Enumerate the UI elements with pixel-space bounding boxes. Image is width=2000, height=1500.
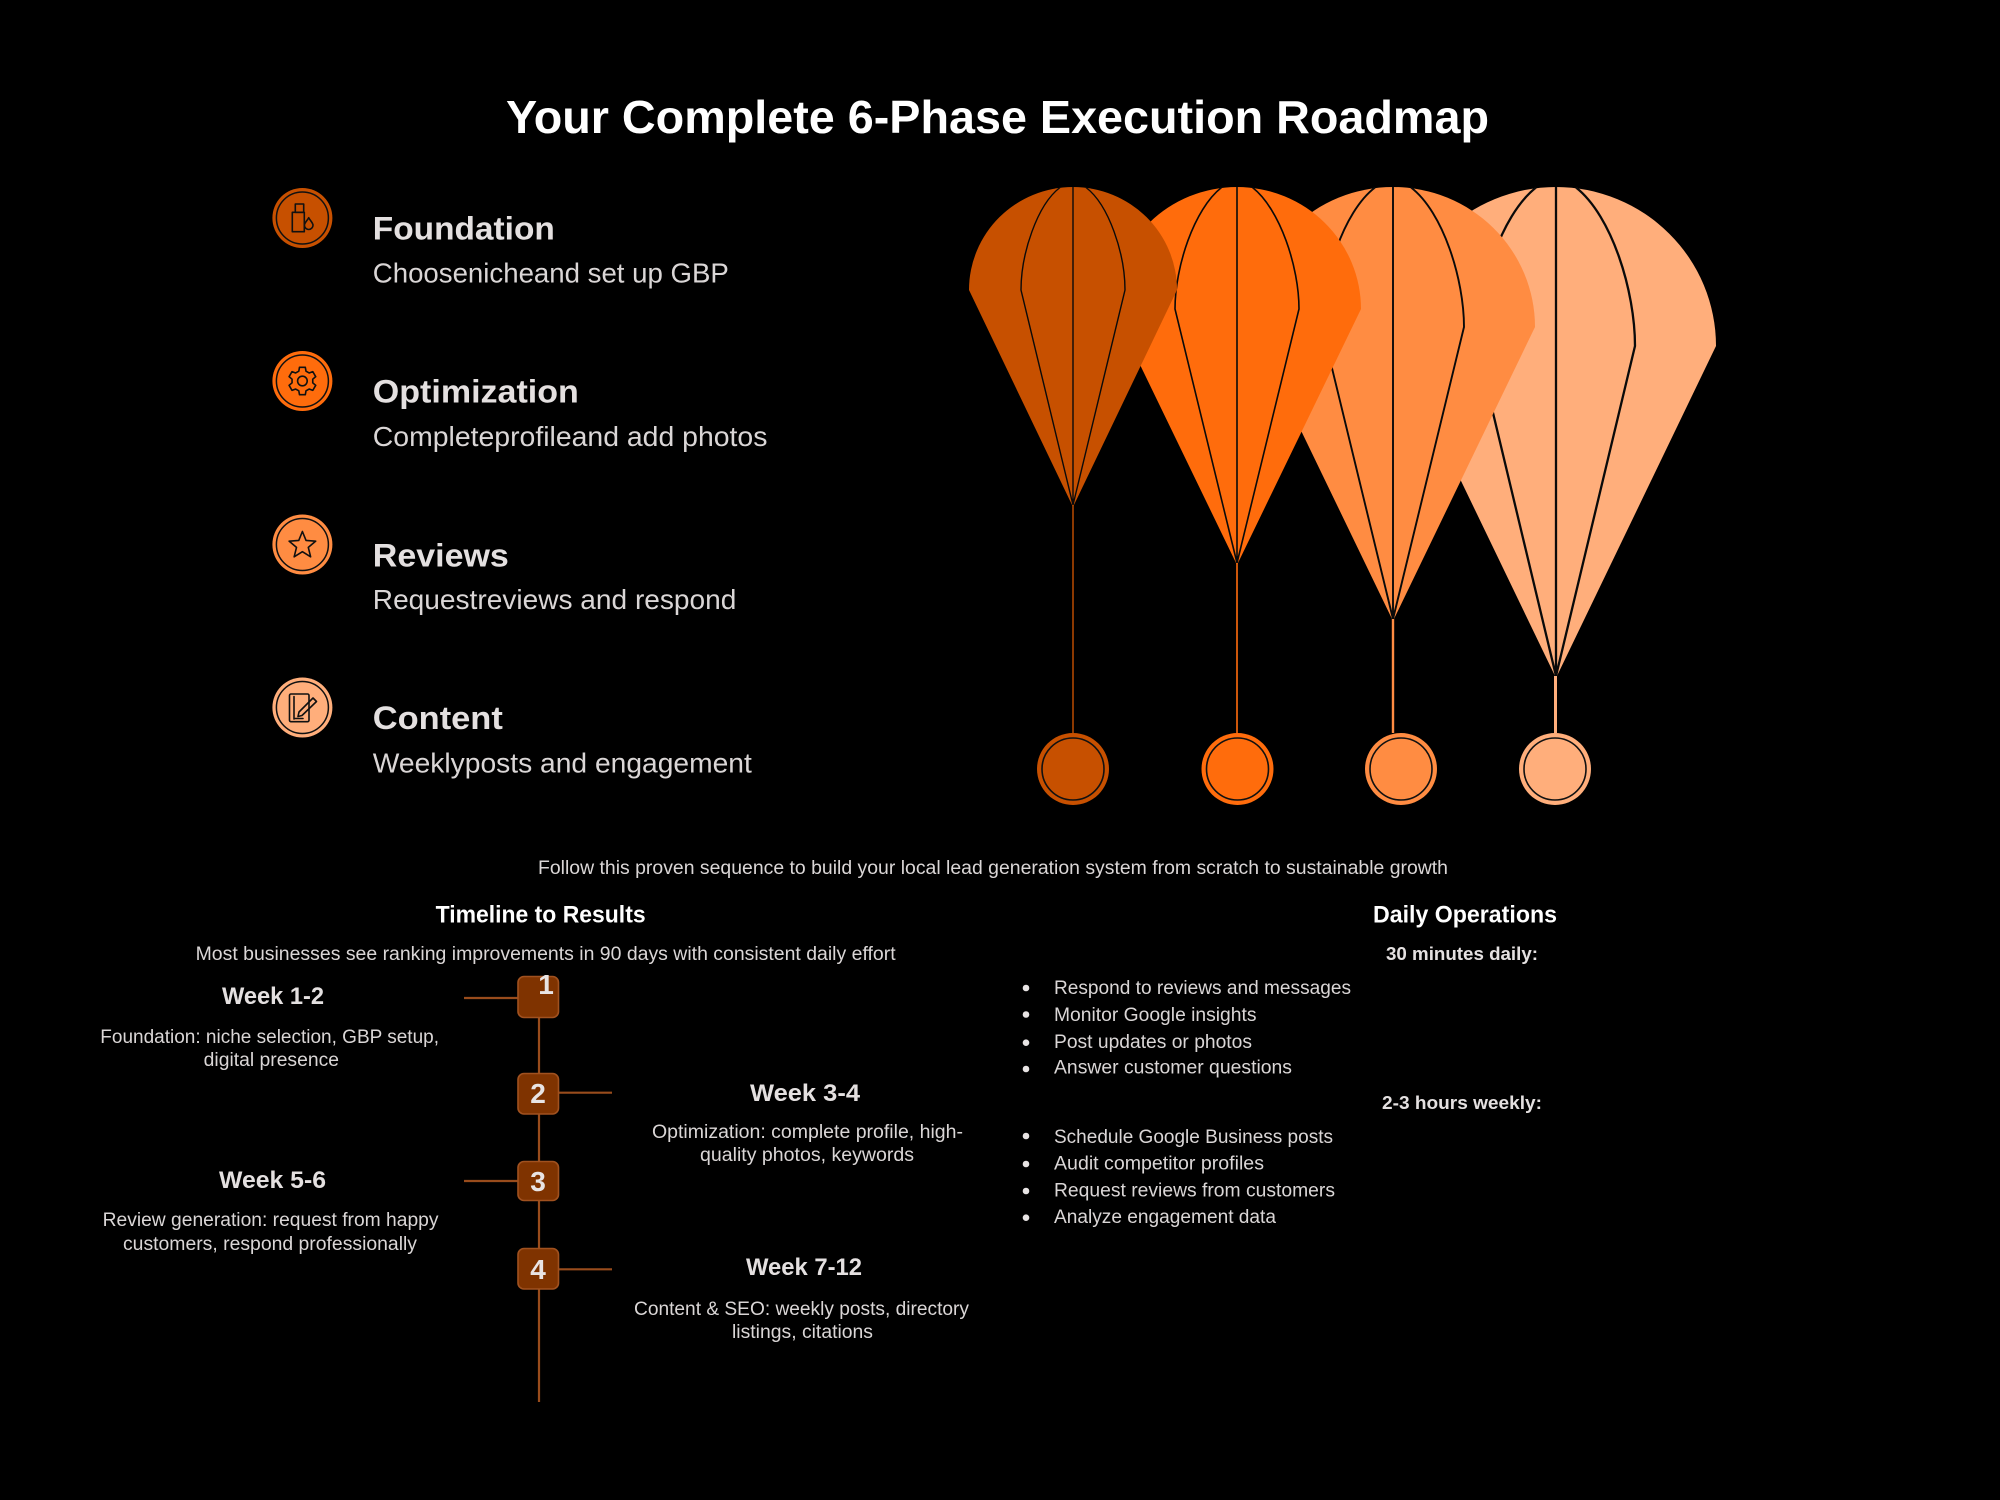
heading: Optimization: Optimization [373, 374, 579, 410]
step 3: Review generation: request from happy [103, 1210, 439, 1231]
list: daily tasks: Answer customer questions [1054, 1058, 1292, 1078]
step 3: 3 [530, 1166, 546, 1197]
heading: Reviews: Reviews [373, 538, 509, 574]
timeline spine [538, 1017, 540, 1402]
step 2: Week 3-4 [750, 1080, 861, 1107]
heading: Timeline to Results: Timeline to Results [436, 902, 646, 929]
step 4: 4 [530, 1254, 546, 1285]
list: daily tasks: Post updates or photos [1054, 1032, 1252, 1053]
step 4: Content & SEO: weekly posts, directory [634, 1299, 970, 1320]
step 1 [100, 969, 559, 1071]
step 1: 1 [538, 969, 554, 1000]
step 4 [518, 1248, 970, 1343]
text: subtitle sequence note: Follow this proven sequence to build your local lead generation system from scratch to sustainable growth [538, 858, 1448, 879]
step 3: Week 5-6 [219, 1167, 326, 1194]
list: daily tasks: Respond to reviews and messages [1054, 978, 1351, 999]
list: weekly tasks: Request reviews from customers [1054, 1180, 1335, 1202]
step 2: 2 [530, 1078, 546, 1109]
heading: Daily Operations: Daily Operations [1373, 902, 1557, 929]
icon: gear [272, 351, 332, 411]
phase: Reviews [272, 514, 736, 615]
text: Reviews description: Requestreviews and respond [373, 584, 736, 615]
chart: balloon graphic [969, 187, 1716, 805]
step 1: Week 1-2 [222, 983, 324, 1010]
balloon 1 [969, 187, 1177, 805]
step 3 [103, 1162, 558, 1255]
step 2: Optimization: complete profile, high- [652, 1122, 963, 1143]
phase: Content [272, 678, 752, 779]
text: Content description: Weeklyposts and engagement [373, 748, 752, 779]
panel: timeline to results [100, 902, 970, 1402]
icon: bottle and drop [272, 188, 332, 248]
text: Optimization description: Completeprofileand add photos [373, 421, 767, 452]
heading: Content: Content [373, 700, 503, 736]
phase: Optimization [272, 351, 767, 452]
subheading: 2-3 hours weekly: 2-3 hours weekly: [1382, 1092, 1542, 1113]
step 1: digital presence [204, 1050, 339, 1071]
balloon 4 [1396, 187, 1716, 805]
balloon 3 [1251, 187, 1535, 805]
step 4: Week 7-12 [746, 1254, 862, 1281]
text: Foundation description: Choosenicheand set up GBP [373, 258, 729, 289]
list: daily tasks [1023, 978, 1351, 1078]
panel: daily operations [1023, 902, 1557, 1228]
step 2 [518, 1074, 963, 1166]
step 1: Foundation: niche selection, GBP setup, [100, 1027, 439, 1048]
balloon 2 [1113, 187, 1361, 805]
icon: notepad and pencil [272, 678, 332, 738]
text: timeline intro: Most businesses see ranking improvements in 90 days with consistent daily effort [196, 944, 896, 965]
list: weekly tasks [1023, 1127, 1335, 1228]
step 2: quality photos, keywords [700, 1145, 914, 1166]
subheading: 30 minutes daily: 30 minutes daily: [1386, 943, 1538, 964]
phase: Foundation [272, 188, 729, 289]
step 3: customers, respond professionally [123, 1234, 417, 1255]
list: weekly tasks: Analyze engagement data [1054, 1207, 1276, 1228]
step 4: listings, citations [732, 1322, 873, 1343]
list: weekly tasks: Schedule Google Business posts [1054, 1127, 1333, 1148]
title: Your Complete 6-Phase Execution Roadmap [506, 91, 1489, 143]
list: weekly tasks: Audit competitor profiles [1054, 1154, 1264, 1174]
icon: star [272, 514, 332, 574]
panel: phase list [272, 188, 767, 779]
heading: Foundation: Foundation [373, 210, 555, 246]
list: daily tasks: Monitor Google insights [1054, 1005, 1256, 1026]
